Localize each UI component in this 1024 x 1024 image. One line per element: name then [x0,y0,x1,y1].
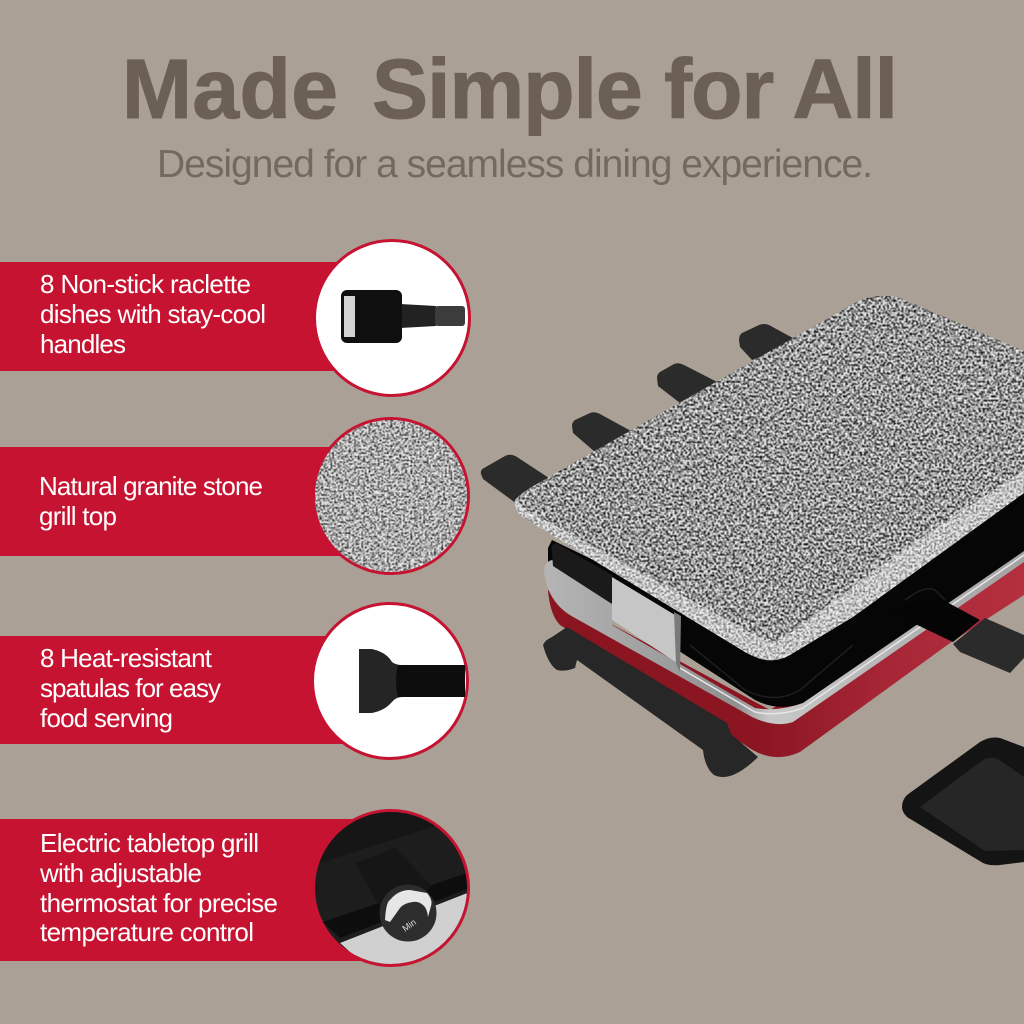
feature text 4: with adjustable [39,858,202,888]
red banner 2 [0,447,345,556]
feature text 4: thermostat for precise [40,888,278,918]
circle: thermostat dial: Min [400,917,418,934]
red banner 4 [0,819,370,961]
feature text 4: temperature control [40,917,254,947]
grill tray interior [548,485,1024,707]
granite stone top [510,290,1024,650]
chrome highlight line [680,555,1024,714]
feature text 2: grill top [39,501,117,531]
circle: spatula icon [312,604,468,758]
tray dish outlines [690,589,945,698]
raclette dish handles, left side [481,324,802,504]
feature text 1: handles [40,329,126,359]
feature text 1: 8 Non-stick raclette [40,269,251,299]
granite stone side edge [510,460,1024,670]
feature text 3: spatulas for easy [40,673,221,703]
feature 2: granite stone [0,415,472,577]
feature text 3 [40,643,221,733]
chrome rim [544,551,1024,724]
circle: thermostat dial [310,800,470,970]
subtitle: Designed for a seamless dining experience. [157,143,873,186]
chrome latch [612,577,677,663]
feature text 1: dishes with stay-cool [40,299,266,329]
title [122,42,898,136]
feature text 2: Natural granite stone [39,471,263,501]
separate raclette dish [902,738,1024,865]
feature text 3: food serving [40,703,173,733]
circle: raclette dish icon [314,240,470,396]
feature text 3: 8 Heat-resistant [40,643,213,673]
near-side handle bar [543,627,758,777]
left dishes stacked [552,543,612,604]
feature 3: spatulas [0,604,468,758]
title: Simple for All [372,42,898,136]
red base [548,555,1024,757]
feature text 2 [39,471,263,531]
product: raclette grill [481,290,1024,777]
feature 1: raclette dishes [0,240,470,396]
circle: granite texture [310,415,472,577]
red banner 3 [0,636,345,744]
right dish handle arm [890,600,980,642]
red banner 1 [0,262,345,371]
feature 4: thermostat [0,800,470,970]
feature text 4 [39,828,278,947]
title: Made [122,42,338,136]
feature text 4: Electric tabletop grill [40,828,259,858]
feature text 1 [40,269,266,359]
right raclette dish handle [953,618,1024,673]
